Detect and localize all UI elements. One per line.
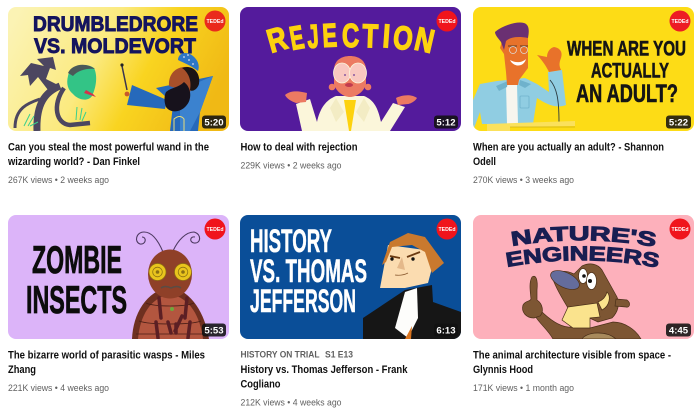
thumbnail: Nature's engineers [473,215,694,339]
thumbnail heading [506,226,660,268]
video title: When are you actually an adult? - Shannon [473,142,664,154]
thumbnail heading: O [391,19,415,58]
thumbnail heading: ACTUALLY [591,60,669,82]
thumbnail: adult [473,7,694,131]
card: History vs. Thomas Jefferson [240,215,461,408]
card: Drumbledrore vs. Moldevort [7,7,229,186]
thumbnail: Rejection [240,7,461,131]
duration badge [202,324,226,336]
video title: Cogliano [240,378,281,390]
thumbnail: zombie insects [8,215,229,339]
card: Nature's engineers [473,215,694,394]
thumbnail heading: T [362,18,379,55]
logo: TED-Ed [670,10,690,32]
thumbnail heading: N [411,21,438,61]
duration badge: 5:12 [436,118,456,128]
logo: TED-Ed [204,218,226,240]
duration badge [436,327,456,334]
logo: TED-Ed: TEDEd [438,19,456,25]
thumbnail heading [266,22,436,54]
thumbnail heading: ENGINEERS [506,246,660,268]
thumbnail heading: VS. MOLDEVORT [34,35,196,58]
thumbnail: Thomas Jefferson [240,215,461,339]
video title [8,350,205,376]
logo: TED-Ed [436,10,458,32]
thumbnail: Drumbledrore vs. Moldevort [8,7,229,131]
duration badge: 4:45 [669,326,689,336]
thumbnail heading: E [287,18,307,57]
duration badge: 5:20 [204,118,224,128]
card: Zombie insects [8,215,229,394]
illustration: Moldevort [15,57,96,131]
view count and age: 267K views • 2 weeks ago [8,175,109,186]
video title: The animal architecture visible from space - [473,350,671,362]
view count and age: 221K views • 4 weeks ago [8,383,109,394]
logo: TED-Ed: TEDEd [671,227,689,233]
thumbnail heading: ZOMBIE [32,239,122,282]
view count and age: 229K views • 2 weeks ago [240,160,342,172]
logo: TED-Ed [436,218,458,240]
duration badge: 5:22 [669,118,688,128]
duration badge [202,116,226,128]
video title: How to deal with rejection [240,142,358,154]
thumbnail heading [27,246,126,314]
logo: TED-Ed: TEDEd [438,227,456,233]
illustration: shrugging man [285,56,417,131]
card: When are you actually an adult? [473,7,694,186]
thumbnail heading: C [342,18,359,55]
video title [7,142,209,168]
thumbnail heading: J [306,17,320,55]
video title: Glynnis Hood [473,364,533,376]
illustration: man pointing at himself [473,23,575,131]
video title: Odell [473,156,496,168]
thumbnail heading [34,16,198,54]
video title [473,350,671,376]
duration badge: 5:53 [204,326,224,336]
duration badge [666,116,691,128]
illustration: wizard [120,53,213,131]
video title: Zhang [8,364,36,376]
logo: TED-Ed [204,10,226,32]
logo: TED-Ed: TEDEd [206,227,224,233]
series label: HISTORY ON TRIAL [240,350,320,360]
illustration: Thomas Jefferson [363,233,461,339]
thumbnail heading: R [263,20,291,60]
thumbnail heading: INSECTS [26,279,127,322]
logo: TED-Ed [670,218,690,240]
view count and age: 212K views • 4 weeks ago [240,398,342,408]
thumbnail heading: DRUMBLEDRORE [33,13,198,36]
view count and age: 171K views • 1 month ago [473,383,574,394]
video title: The bizarre world of parasitic wasps - Miles [8,350,205,362]
thumbnail heading: JEFFERSON [250,283,356,319]
thumbnail heading: E [321,17,338,54]
thumbnail heading: I [381,18,391,55]
thumbnail heading: NATURE'S [511,226,656,246]
illustration: zombie cockroach [132,232,209,339]
video title: Can you steal the most powerful wand in the [8,142,209,154]
logo: TED-Ed: TEDEd [671,19,689,25]
logo: TED-Ed: TEDEd [206,19,224,25]
duration badge: 6:13 [436,326,456,336]
thumbnail heading: VS. THOMAS [250,253,367,289]
thumbnail heading [566,40,686,102]
thumbnail heading [250,229,366,312]
video title: wizarding world? - Dan Finkel [7,156,140,168]
video title [240,364,408,390]
thumbnail heading: HISTORY [250,223,332,259]
illustration: beaver [523,264,641,339]
video title: History vs. Thomas Jefferson - Frank [240,364,408,376]
view count and age: 270K views • 3 weeks ago [473,175,574,186]
video title [473,142,664,168]
duration badge [434,116,458,128]
card: Rejection [240,7,461,172]
duration badge [666,324,691,336]
series label: S1 E13 [325,350,353,360]
